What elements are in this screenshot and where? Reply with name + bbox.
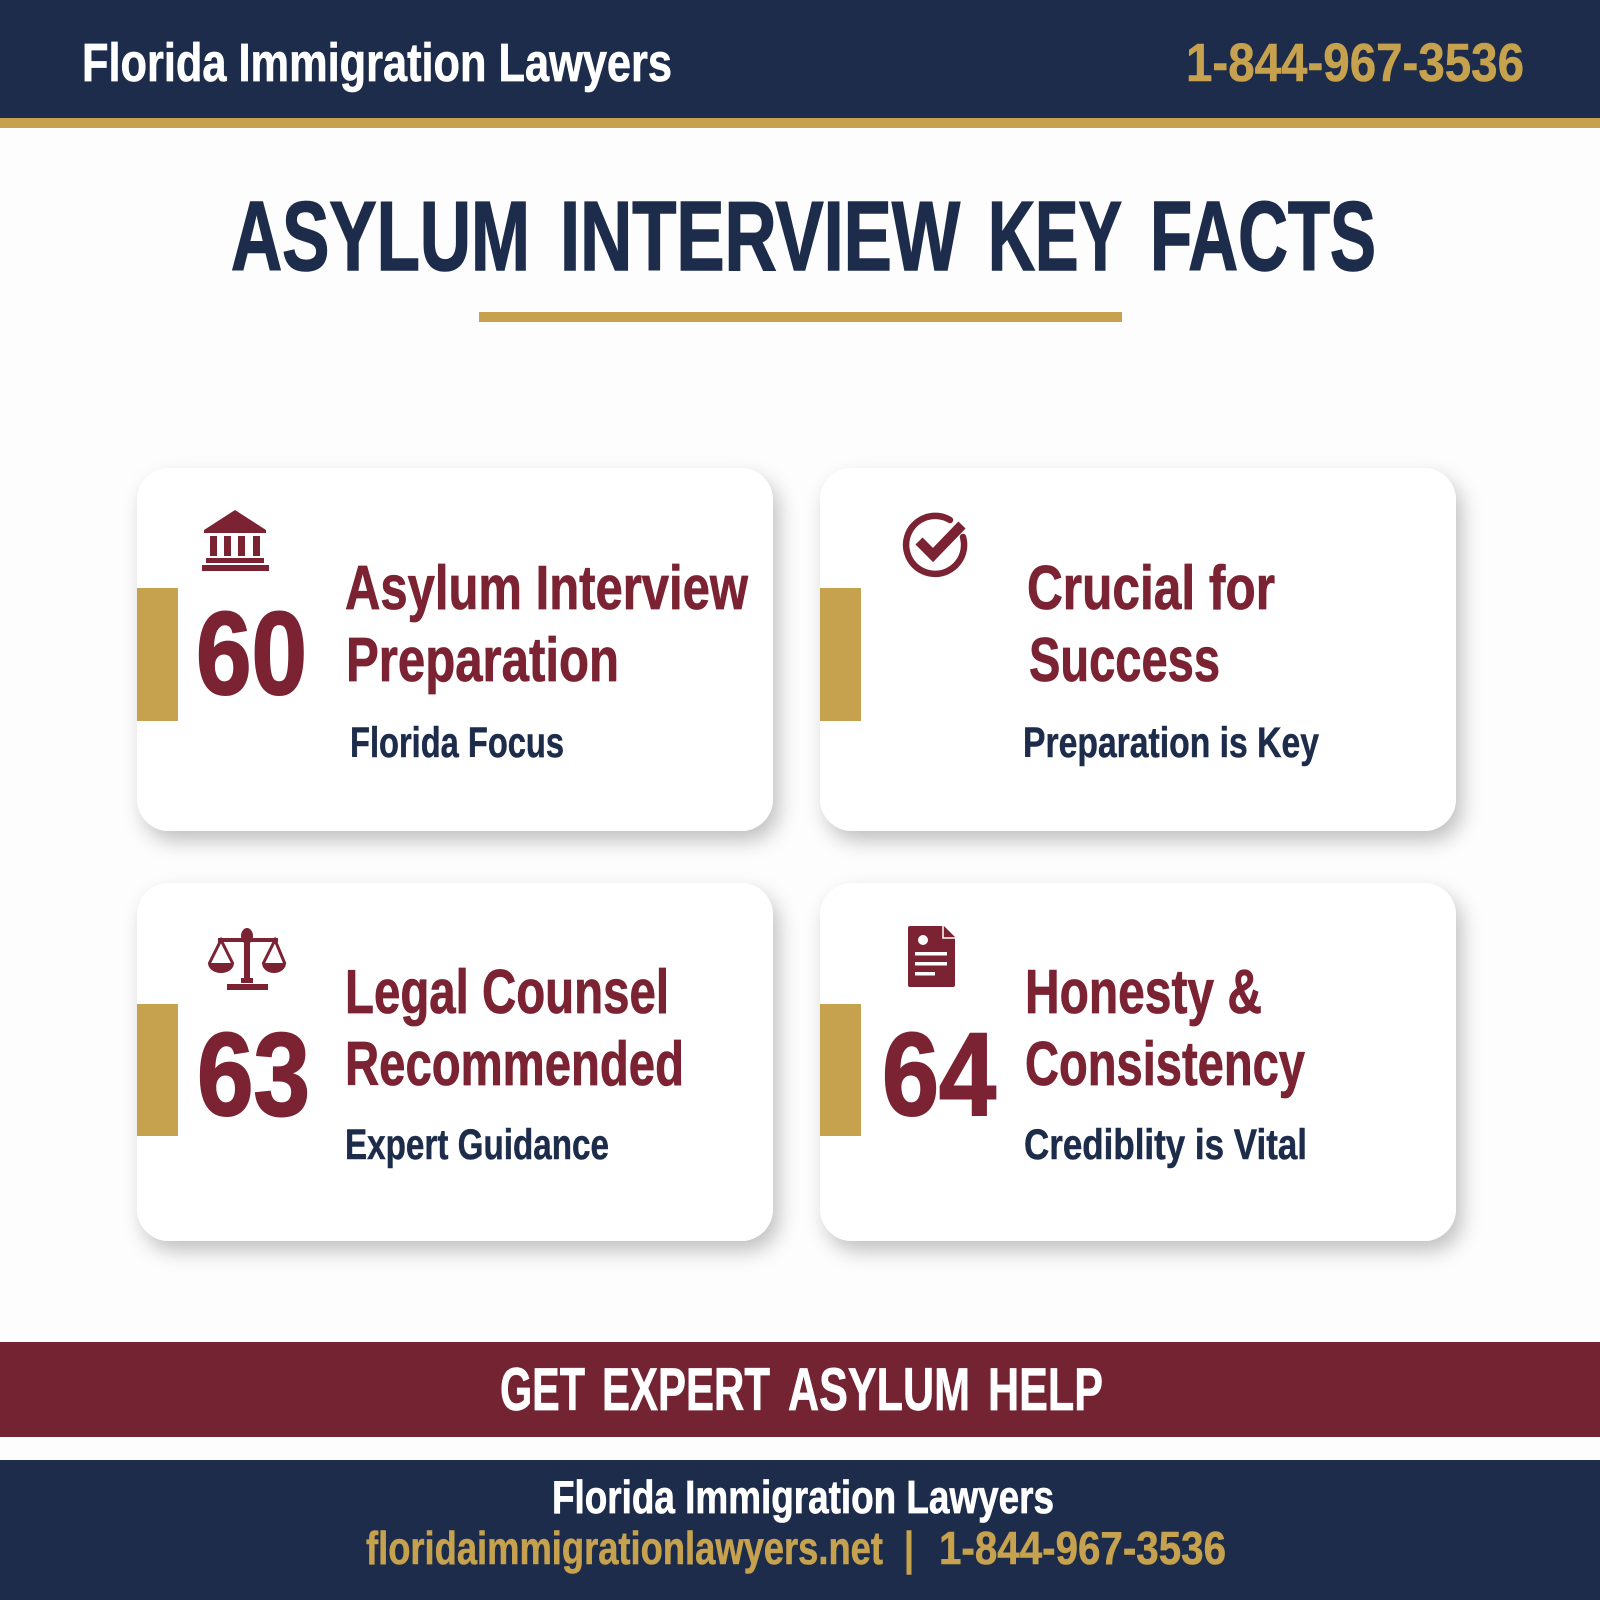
card heading: Legal Counsel (345, 958, 669, 1027)
card heading: Honesty & (1025, 958, 1262, 1027)
call to action text (500, 1356, 1103, 1423)
icon: scales of justice (208, 928, 286, 990)
card subtext: Preparation is Key (1023, 719, 1319, 767)
panel: crucial for success: Success (1029, 626, 1220, 695)
panel: honesty and consistency (820, 883, 1456, 1241)
card subtext: Crediblity is Vital (1024, 1121, 1307, 1169)
footer website and phone: floridaimmigrationlawyers.net (366, 1522, 883, 1574)
gold accent bar (820, 1004, 861, 1136)
footer (0, 1460, 1600, 1600)
title underline (479, 312, 1122, 322)
call to action text: GET (500, 1356, 585, 1423)
title: ASYLUM (231, 181, 530, 291)
title (231, 181, 1376, 291)
gold accent bar (137, 588, 178, 721)
header phone number: 1-844-967-3536 (1186, 33, 1524, 93)
footer firm name: Florida Immigration Lawyers (552, 1471, 1054, 1523)
number 64: 64 (882, 1009, 996, 1141)
icon: document (908, 926, 955, 987)
title: FACTS (1150, 181, 1376, 291)
panel: legal counsel recommended: Recommended (345, 1030, 684, 1099)
title: KEY (988, 181, 1122, 291)
header firm name: Florida Immigration Lawyers (82, 33, 672, 93)
footer website and phone: 1-844-967-3536 (939, 1522, 1226, 1574)
call to action text: ASYLUM (788, 1356, 970, 1423)
card heading: Asylum Interview (345, 554, 749, 623)
card heading: Crucial for (1027, 554, 1275, 623)
call to action band (0, 1342, 1600, 1437)
panel: asylum interview preparation: Preparation (346, 626, 619, 695)
panel: asylum interview preparation (137, 468, 773, 831)
gold accent bar (137, 1004, 178, 1136)
footer website and phone: | (904, 1522, 914, 1574)
number 63: 63 (197, 1009, 310, 1141)
card subtext: Expert Guidance (345, 1121, 609, 1169)
icon: check circle (906, 516, 964, 574)
header bar (0, 0, 1600, 128)
icon: courthouse (202, 510, 269, 571)
call to action text: HELP (988, 1356, 1103, 1423)
call to action text: EXPERT (602, 1356, 770, 1423)
panel: legal counsel recommended (137, 883, 773, 1241)
panel: honesty and consistency: Consistency (1025, 1030, 1305, 1099)
panel: crucial for success (820, 468, 1456, 831)
title: INTERVIEW (560, 181, 960, 291)
card subtext: Florida Focus (350, 719, 564, 767)
gold accent bar (820, 588, 861, 721)
number 60: 60 (196, 588, 307, 720)
